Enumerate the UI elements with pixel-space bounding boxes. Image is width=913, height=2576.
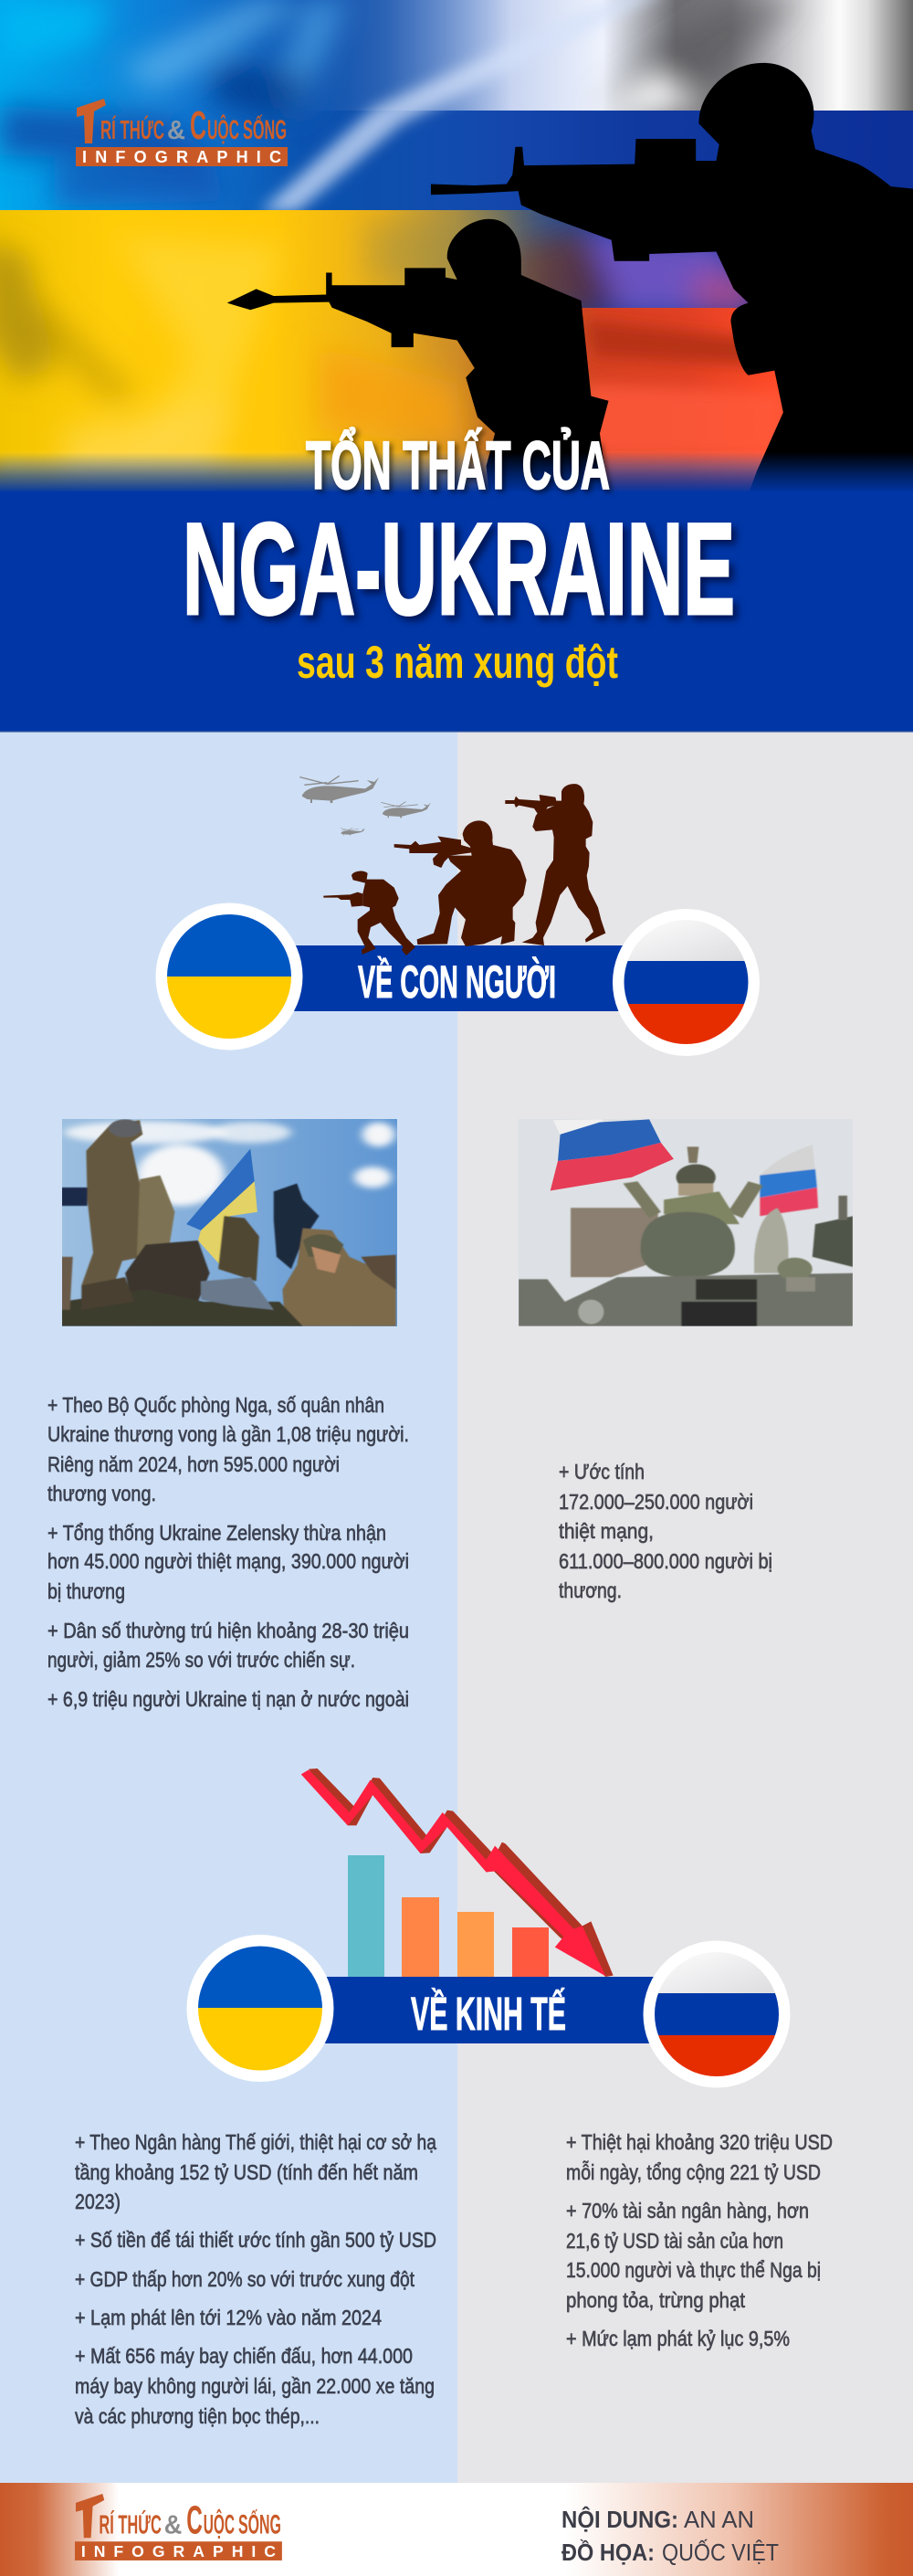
header: blue title band [0, 491, 913, 731]
text block: Ukraine human losses: hơn 45.000 người thiệt mạng, 390.000 người [47, 1549, 409, 1573]
flag left [553, 1120, 603, 1135]
text block: Russia human losses [559, 1460, 772, 1602]
logo: footer [75, 2494, 282, 2560]
panel: Russia column background [457, 731, 913, 2483]
text block: Ukraine human losses: thương vong. [47, 1482, 156, 1505]
text block: Russia economic losses: + Mức lạm phát kỷ lục 9,5% [566, 2327, 790, 2350]
icon: small helicopter [341, 828, 365, 835]
credits: ĐỒ HỌA: [561, 2539, 655, 2566]
Ukrainian flag layer [0, 0, 504, 210]
icon: standing soldier [505, 784, 605, 945]
icon: large helicopter [299, 776, 379, 803]
section header: economy [186, 1935, 791, 2088]
logo: footer: UỘC [204, 2508, 235, 2539]
logo: footer: C [186, 2498, 203, 2542]
logo: footer: INFOGRAPHIC [81, 2542, 276, 2560]
logo: header: UỘC [207, 114, 239, 145]
panel: Ukraine column background [0, 731, 457, 2483]
title line: TỔN THẤT CỦA: TỔN THẤT CỦA [306, 428, 610, 503]
text block: Ukraine economic losses: + Theo Ngân hàng Thế giới, thiệt hại cơ sở hạ [75, 2130, 436, 2154]
credits: AN AN [684, 2506, 754, 2533]
credits: QUỐC VIỆT [662, 2539, 779, 2566]
logo: footer: & [164, 2510, 182, 2539]
icon: Ukraine flag circle [186, 1935, 334, 2082]
text block: Russia economic losses: + Thiệt hại khoảng 320 triệu USD [566, 2130, 833, 2154]
text block: Ukraine human losses: + Tổng thống Ukraine Zelensky thừa nhận [47, 1521, 386, 1545]
logo: header: RÍ THỨC [100, 114, 164, 145]
text block: Ukraine economic losses: + Lạm phát lên tới 12% vào năm 2024 [75, 2306, 382, 2329]
text block: Russia human losses: + Ước tính [559, 1460, 645, 1483]
credits: NỘI DUNG: [561, 2506, 678, 2533]
icon: crouching soldier [323, 871, 415, 955]
text block: Russia economic losses: + 70% tài sản ngân hàng, hơn [566, 2199, 809, 2222]
text block: Ukraine human losses: + 6,9 triệu người Ukraine tị nạn ở nước ngoài [47, 1687, 409, 1711]
text block: Ukraine human losses: Riêng năm 2024, hơn 595.000 người [47, 1452, 340, 1476]
text block: Ukraine human losses: + Theo Bộ Quốc phòng Nga, số quân nhân [47, 1393, 384, 1417]
text block: Ukraine economic losses: + Mất 656 máy bay chiến đấu, hơn 44.000 [75, 2344, 413, 2368]
header: flag background [0, 0, 913, 494]
soldier silhouette: small with muzzle flash [227, 219, 609, 494]
text block: Ukraine economic losses [75, 2130, 436, 2428]
soldier [676, 1164, 717, 1184]
footer band [0, 2483, 913, 2576]
logo: header [76, 99, 288, 166]
photo: Russian soldier on armored vehicle [519, 1119, 853, 1326]
text block: Russia human losses: thương. [559, 1578, 622, 1602]
text block: Russia economic losses: mỗi ngày, tổng cộng 221 tỷ USD [566, 2160, 821, 2184]
icon: kneeling soldier [394, 820, 527, 946]
light blending above title band [0, 459, 913, 479]
banner heading: VỀ CON NGƯỜI [358, 956, 556, 1008]
logo: header: SỐNG [243, 114, 287, 145]
text block: Russia economic losses [566, 2130, 833, 2350]
credits [561, 2506, 779, 2566]
text block: Ukraine human losses: bị thương [47, 1579, 125, 1603]
text block: Russia economic losses: 15.000 người và thực thể Nga bị [566, 2258, 821, 2282]
flag [186, 1149, 255, 1230]
text block: Ukraine economic losses: và các phương tiện bọc thép,... [75, 2404, 320, 2428]
arrow: falling trend [301, 1768, 614, 1977]
banner [324, 1977, 655, 2043]
vehicle [519, 1273, 853, 1326]
icon: helicopters [299, 776, 431, 835]
flag right [760, 1145, 818, 1216]
text block: Russia economic losses: phong tỏa, trừng phạt [566, 2288, 746, 2312]
Russian flag layer [322, 0, 913, 111]
subtitle: sau 3 năm xung đột [297, 637, 618, 688]
text block: Russia economic losses: 21,6 tỷ USD tài sản của hơn [566, 2229, 783, 2253]
bar chart [348, 1855, 549, 1978]
text block: Ukraine human losses: Ukraine thương vong là gần 1,08 triệu người. [47, 1422, 409, 1446]
logo: header: C [190, 103, 206, 148]
text block: Russia human losses: thiệt mạng, [559, 1519, 654, 1543]
section header: people [155, 903, 760, 1056]
icon: Ukraine flag circle [155, 903, 303, 1050]
right soldier [274, 1184, 320, 1269]
banner heading: VỀ KINH TẾ [411, 1987, 566, 2040]
text block: Ukraine economic losses: máy bay không người lái, gần 22.000 xe tăng [75, 2374, 435, 2398]
icon: soldiers silhouettes [323, 784, 605, 955]
photo: Ukrainian soldiers with flag [61, 1119, 397, 1326]
icon: medium helicopter [381, 802, 431, 818]
icon: Russia flag circle [613, 909, 760, 1056]
left standing soldier [81, 1120, 142, 1285]
logo: header: INFOGRAPHIC [82, 148, 281, 166]
soldier silhouette: large [431, 63, 913, 494]
text block: Russia human losses: 611.000–800.000 người bị [559, 1549, 772, 1573]
top rule [0, 731, 913, 733]
text block: Ukraine economic losses: 2023) [75, 2190, 121, 2213]
text block: Ukraine economic losses: + GDP thấp hơn 20% so với trước xung đột [75, 2267, 415, 2291]
text block: Russia human losses: 172.000–250.000 người [559, 1490, 753, 1514]
text block: Ukraine human losses [47, 1393, 409, 1711]
logo: header: & [167, 116, 185, 145]
banner [294, 945, 624, 1011]
text block: Ukraine human losses: người, giảm 25% so với trước chiến sự. [47, 1648, 355, 1672]
logo: footer: RÍ THỨC [99, 2510, 162, 2539]
text block: Ukraine economic losses: tầng khoảng 152 tỷ USD (tính đến hết năm [75, 2160, 418, 2184]
text block: Ukraine economic losses: + Số tiền để tái thiết ước tính gần 500 tỷ USD [75, 2228, 436, 2252]
icon: Russia flag circle [643, 1940, 791, 2088]
text block: Ukraine human losses: + Dân số thường trú hiện khoảng 28-30 triệu [47, 1619, 409, 1642]
logo: footer: SỐNG [238, 2508, 281, 2539]
